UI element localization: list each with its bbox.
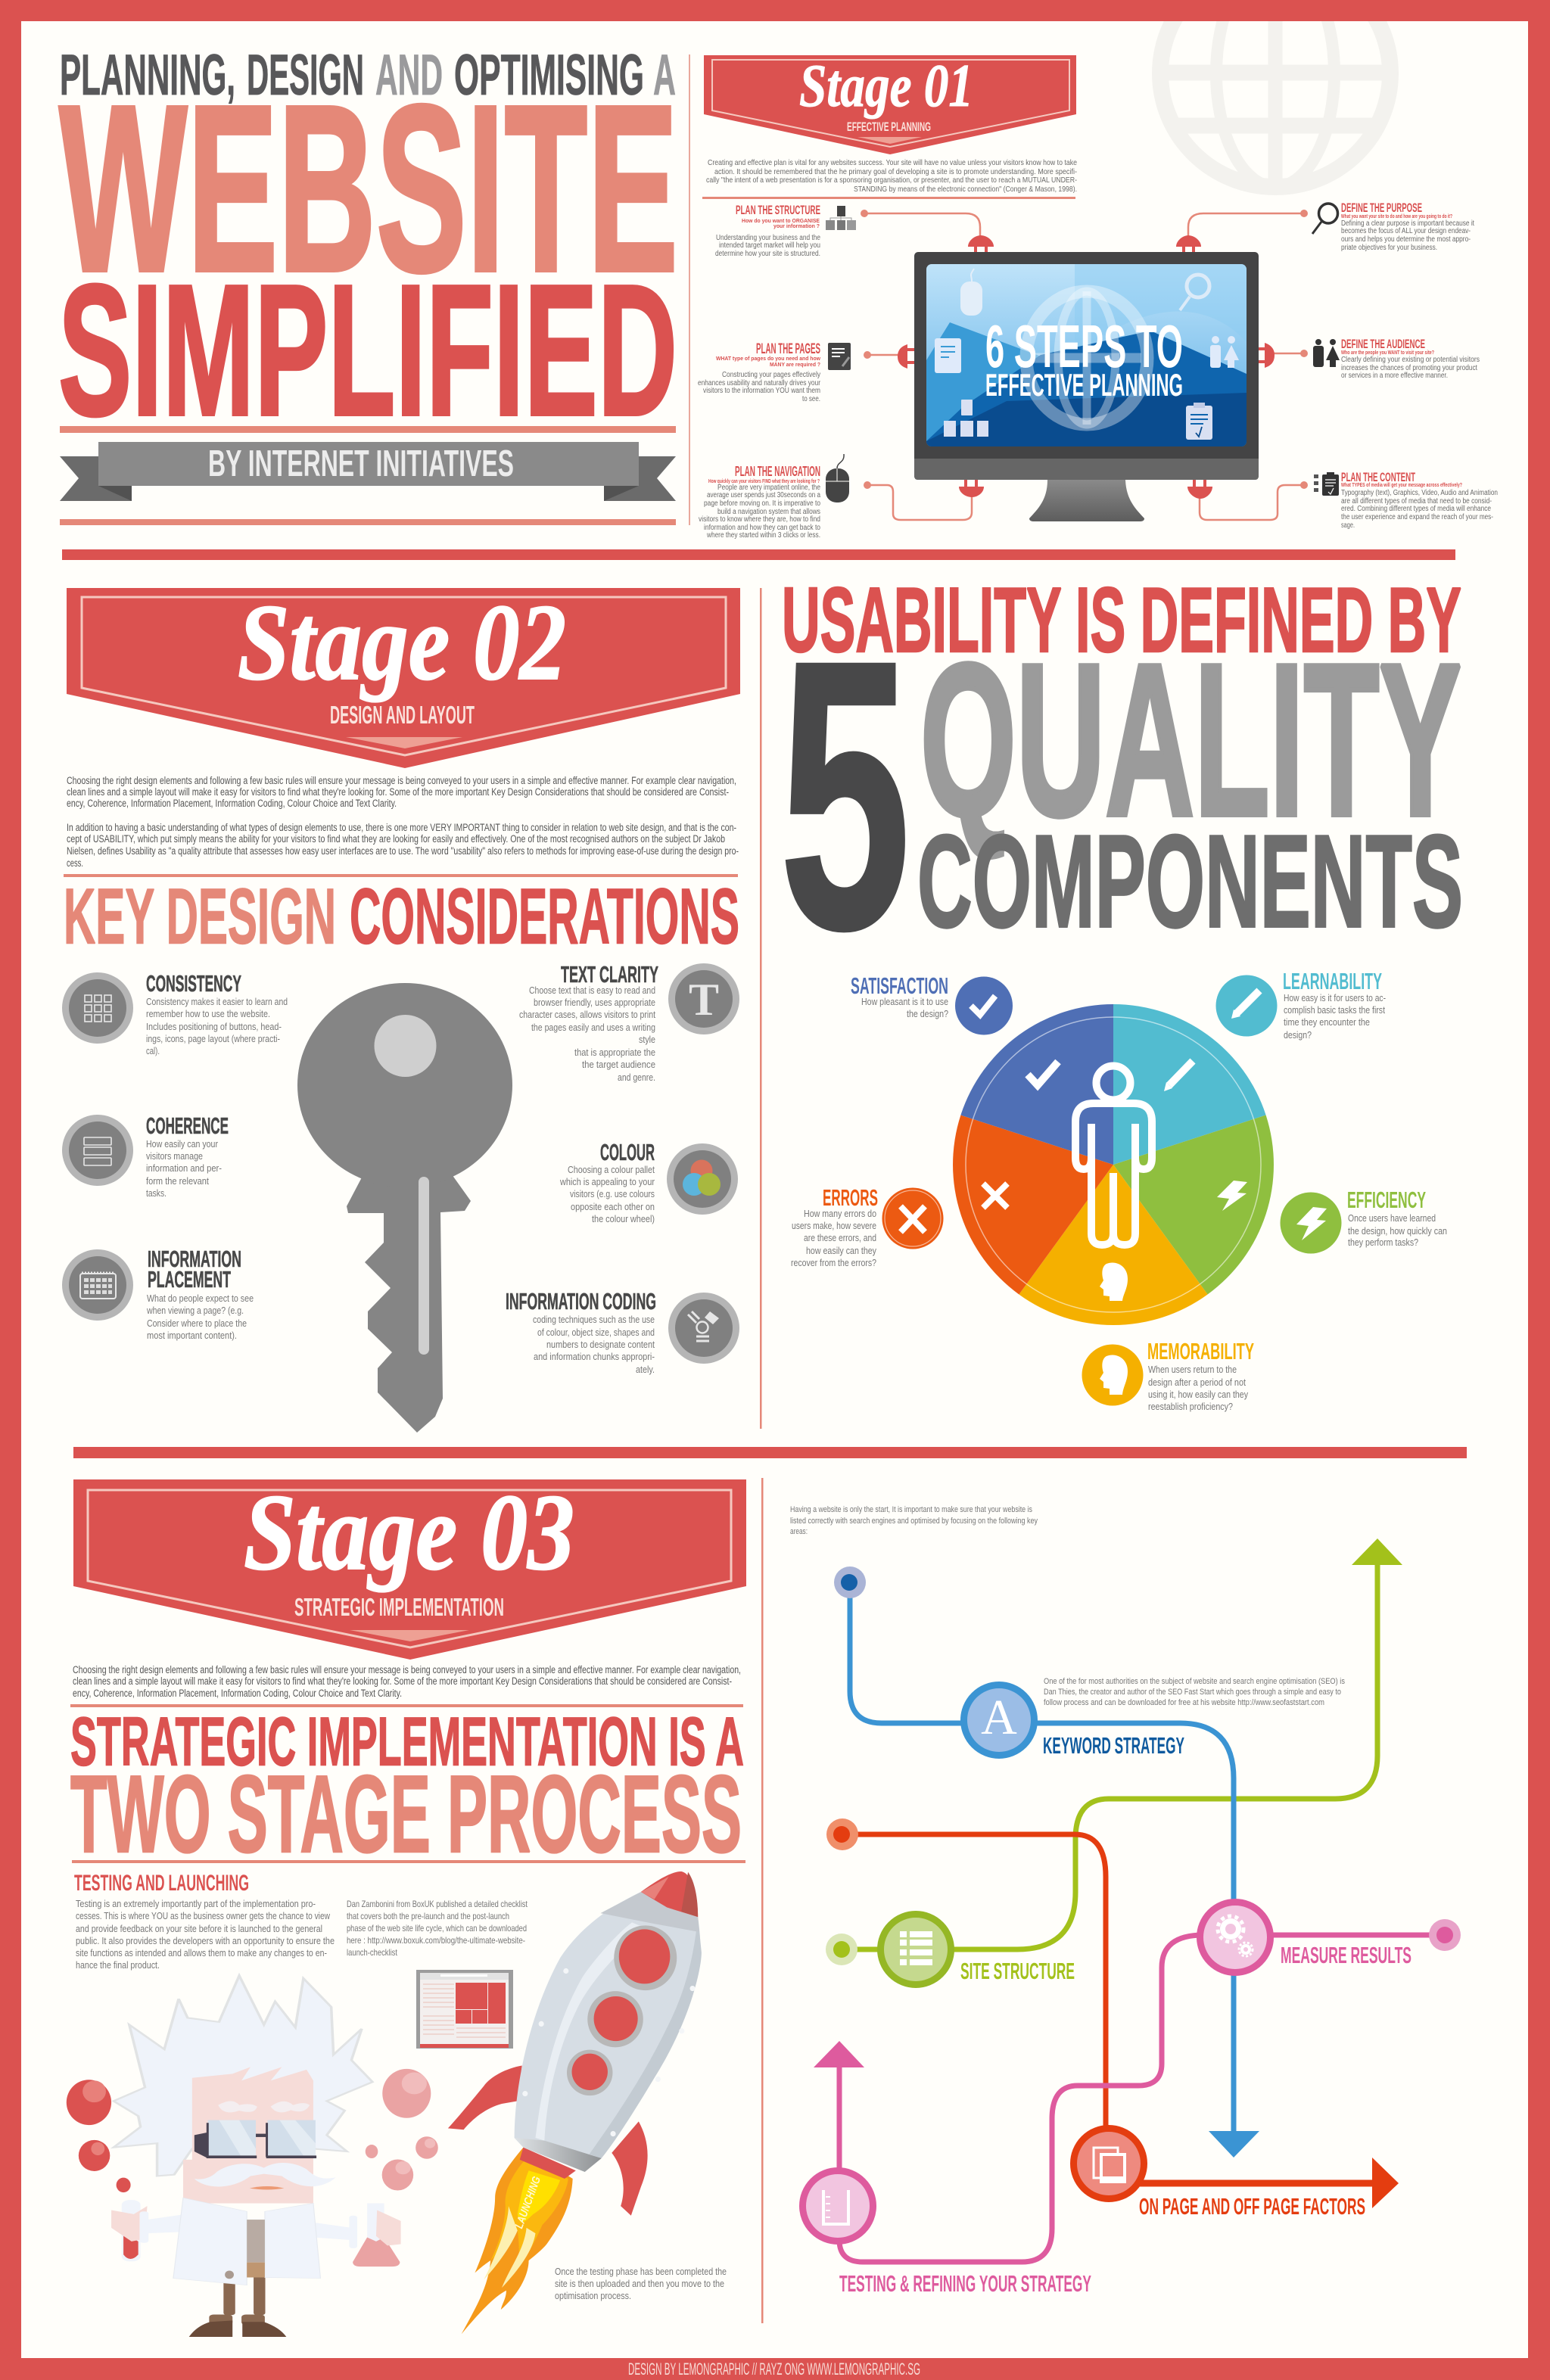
step: define the purpose: becomes the focus of ALL your design endeav- bbox=[1341, 227, 1471, 235]
intro paragraphs: cess. bbox=[67, 857, 83, 869]
callout: learnability: How easy is it for users to ac- bbox=[1284, 992, 1386, 1003]
monitor bbox=[914, 252, 1259, 521]
item: colour: the colour wheel) bbox=[592, 1213, 655, 1224]
footer credit: DESIGN BY LEMONGRAPHIC // RAYZ ONG WWW.LEMONGRAPHIC.SG bbox=[628, 2360, 920, 2378]
text block: testing: hance the final product. bbox=[76, 1959, 160, 1971]
monitor headline: EFFECTIVE PLANNING bbox=[985, 367, 1183, 403]
start point: blue bbox=[834, 1566, 866, 1598]
icon: lightning bbox=[1217, 1181, 1247, 1211]
item: colour: COLOUR bbox=[600, 1139, 655, 1165]
heading: two stage process: TWO STAGE PROCESS bbox=[70, 1753, 742, 1875]
end point: pink bbox=[1429, 1919, 1461, 1951]
panel: stage 03 strategic implementation bbox=[67, 1473, 746, 2337]
icon: org chart bbox=[826, 206, 856, 230]
callout: satisfaction bbox=[851, 972, 1013, 1035]
step: plan the navigation bbox=[699, 454, 849, 540]
callout: memorability: MEMORABILITY bbox=[1147, 1338, 1254, 1364]
rivets bbox=[522, 1968, 696, 2136]
text block: SEO note: Dan Thies, the creator and author of the SEO Fast Start which goes through a simple and easy to bbox=[1044, 1688, 1341, 1697]
text block: checklist: here : http://www.boxuk.com/blog/the-ultimate-website- bbox=[347, 1935, 525, 1946]
rocket body bbox=[515, 1871, 700, 2172]
step: plan the navigation: PLAN THE NAVIGATION bbox=[735, 464, 820, 479]
rule bbox=[64, 874, 738, 877]
step: plan the structure: Understanding your business and the bbox=[716, 234, 820, 242]
section bar bbox=[62, 549, 1455, 560]
banner: stage 03: STRATEGIC IMPLEMENTATION bbox=[294, 1593, 504, 1621]
nozzle bbox=[520, 2148, 576, 2179]
icon: lightning badge bbox=[1281, 1193, 1341, 1253]
item: consistency: Consistency makes it easier to learn and bbox=[146, 996, 288, 1007]
intro paragraph: cally "the intent of a web presentation is for a sponsoring organisation, or presenter, and the user to reach a MUTUAL UNDER- bbox=[706, 176, 1077, 185]
monitor headline bbox=[985, 313, 1183, 403]
text block: after testing: Once the testing phase has been completed the bbox=[555, 2266, 727, 2277]
intro paragraphs: In addition to having a basic understanding of what types of design elements to use, there is one more VERY IMPORTANT thing to consider in relation to web site design, and that is the con- bbox=[67, 822, 736, 833]
heading: planning, design and optimising a bbox=[60, 43, 676, 107]
icon: document bbox=[828, 343, 851, 370]
step: plan the structure: intended target market will help you bbox=[719, 241, 820, 250]
item: information coding bbox=[506, 1288, 739, 1375]
item: text clarity: Choose text that is easy to read and bbox=[529, 985, 655, 996]
item: text clarity bbox=[519, 961, 739, 1083]
step: plan the navigation: How quickly can your visitors FIND what they are looking for ? bbox=[708, 478, 820, 484]
item: information coding: and information chunks appropri- bbox=[534, 1351, 655, 1362]
text block: checklist: phase of the web site life cycle, which can be downloaded bbox=[347, 1923, 527, 1934]
intro paragraph: Creating and effective plan is vital for any websites success. Your site will have no value unless your visitors know how to take bbox=[708, 158, 1077, 167]
heading: key design considerations: CONSIDERATIONS bbox=[350, 873, 739, 961]
step: plan the structure: PLAN THE STRUCTURE bbox=[736, 203, 820, 217]
column divider bbox=[689, 54, 690, 525]
callout: satisfaction: How pleasant is it to use bbox=[861, 996, 948, 1007]
step: plan the structure: How do you want to ORGANISE bbox=[742, 217, 820, 224]
item: colour: which is appealing to your bbox=[559, 1176, 655, 1187]
banner: stage 03 bbox=[73, 1473, 746, 1660]
item: colour: opposite each other on bbox=[571, 1201, 655, 1212]
intro paragraphs: cept of USABILITY, which put simply means the ability for your visitors to find what they are looking for easily and effectively. One of the most recognised authors on the subject Dr Jakob bbox=[67, 833, 725, 845]
heading: planning, design and optimising a: AND bbox=[375, 43, 443, 107]
panel: stage 02 design and layout bbox=[62, 583, 740, 1433]
node: site structure bbox=[881, 1915, 1075, 1984]
callout: memorability: using it, how easily can they bbox=[1148, 1389, 1248, 1400]
heading: planning, design and optimising a: OPTIMISING bbox=[454, 43, 644, 107]
callout: learnability: LEARNABILITY bbox=[1283, 968, 1382, 994]
scientist face bbox=[183, 2067, 313, 2203]
item: text clarity: the target audience bbox=[582, 1059, 655, 1070]
item: information placement: What do people expect to see bbox=[147, 1293, 254, 1304]
icon: clipboard bbox=[1186, 403, 1212, 440]
step: define the audience: DEFINE THE AUDIENCE bbox=[1341, 337, 1425, 351]
icon: magnifier bbox=[1180, 275, 1209, 310]
item: colour: visitors (e.g. use colours bbox=[570, 1188, 655, 1199]
heading: planning, design and optimising a: A bbox=[653, 43, 676, 107]
launching label: LAUNCHING bbox=[512, 2174, 543, 2230]
icon: grid bbox=[62, 972, 133, 1044]
item: consistency: Includes positioning of buttons, head- bbox=[146, 1021, 282, 1032]
step: plan the pages bbox=[698, 341, 851, 403]
text block: after testing: optimisation process. bbox=[555, 2290, 631, 2301]
step: plan the content: are all different types of media that need to be consid- bbox=[1341, 497, 1492, 506]
callout: errors: users make, how severe bbox=[792, 1220, 876, 1231]
icon: head bbox=[1100, 1263, 1128, 1301]
callout: errors: how easily can they bbox=[806, 1245, 876, 1256]
icon: mouse bbox=[960, 269, 982, 316]
icon: people bbox=[1210, 336, 1239, 368]
step: plan the pages: Constructing your pages effectively bbox=[722, 371, 820, 379]
panel: usability quality components bbox=[780, 568, 1463, 1412]
item: information placement: PLACEMENT bbox=[148, 1266, 231, 1293]
step: plan the navigation: where they started within 3 clicks or less. bbox=[706, 531, 820, 540]
person outline bbox=[1075, 1066, 1152, 1245]
step: plan the content: the user experience and expand the reach of your mes- bbox=[1341, 513, 1493, 521]
step: plan the pages: enhances usability and naturally drives your bbox=[698, 379, 821, 387]
rule bbox=[70, 1704, 743, 1707]
step: define the audience: or services in a more effective manner. bbox=[1341, 372, 1448, 380]
callout: memorability: design after a period of not bbox=[1148, 1377, 1246, 1388]
item: information placement bbox=[62, 1246, 254, 1341]
item: consistency: cal). bbox=[146, 1045, 160, 1056]
rule bbox=[60, 426, 676, 433]
node: measure results bbox=[1200, 1902, 1411, 1972]
item: colour: Choosing a colour pallet bbox=[568, 1164, 655, 1175]
item: information coding: INFORMATION CODING bbox=[506, 1288, 656, 1314]
step: plan the content bbox=[1314, 470, 1498, 530]
portholes bbox=[567, 1925, 677, 2095]
text block: flow intro: Having a website is only the start, It is important to make sure that your website is bbox=[790, 1505, 1032, 1514]
icon: check bbox=[1028, 1062, 1058, 1085]
node: on page and off page factors bbox=[1073, 2128, 1365, 2220]
text block: testing: Testing is an extremely importantly part of the implementation pro- bbox=[76, 1898, 316, 1909]
icon: calendar bbox=[62, 1249, 133, 1321]
text block: checklist: launch-checklist bbox=[347, 1947, 398, 1958]
callout: satisfaction: the design? bbox=[907, 1008, 948, 1019]
text block: checklist: that covers both the pre-launch and the post-launch bbox=[347, 1911, 509, 1921]
step: plan the navigation: average user spends just 30seconds on a bbox=[707, 491, 820, 499]
step: plan the navigation: page before moving on. It is imperative to bbox=[704, 499, 820, 508]
item: text clarity: that is appropriate the bbox=[574, 1047, 655, 1058]
start point: green bbox=[826, 1934, 857, 1965]
banner: stage 01: EFFECTIVE PLANNING bbox=[847, 120, 931, 134]
text block: flow intro: areas: bbox=[790, 1527, 808, 1536]
step: plan the navigation: visitors to know where they are, how to find bbox=[699, 515, 820, 524]
heading: website: WEBSITE bbox=[59, 56, 678, 321]
step: define the purpose: What you want your site to do and how are you going to do it? bbox=[1341, 213, 1452, 219]
panel: stage 01 planning bbox=[698, 53, 1498, 540]
icon: magnifier bbox=[1312, 204, 1338, 234]
node: keyword strategy bbox=[964, 1685, 1184, 1759]
step: define the purpose: DEFINE THE PURPOSE bbox=[1341, 201, 1422, 215]
text block: testing: public. It also provides the developers with an opportunity to ensure the bbox=[76, 1935, 335, 1946]
text block: testing: cesses. This is where YOU as the business owner gets the chance to view bbox=[76, 1910, 330, 1921]
step: plan the structure: determine how your site is structured. bbox=[715, 250, 820, 258]
step: plan the content: Typography (text), Graphics, Video, Audio and Animation bbox=[1341, 489, 1498, 497]
step: plan the pages: MANY are required ? bbox=[770, 361, 820, 368]
item: information coding: numbers to designate content bbox=[546, 1339, 655, 1350]
icon: head badge bbox=[1082, 1344, 1143, 1406]
item: text clarity: the pages easily and uses a writing bbox=[531, 1022, 655, 1033]
route: green line bbox=[842, 1538, 1402, 1949]
background globe watermark bbox=[1160, 0, 1390, 187]
item: consistency: ings, icons, page layout (where practi- bbox=[146, 1033, 280, 1044]
rocket base bbox=[515, 2138, 602, 2172]
item: information placement: INFORMATION bbox=[148, 1246, 241, 1272]
icon: colour wheel bbox=[667, 1143, 738, 1215]
icon: pencil badge bbox=[1215, 975, 1278, 1037]
connectors and plugs bbox=[861, 210, 1308, 520]
step: define the audience: Who are the people you WANT to visit your site? bbox=[1341, 349, 1434, 356]
step: plan the content: sage. bbox=[1341, 521, 1355, 530]
callout: errors: ERRORS bbox=[823, 1184, 878, 1211]
text block: SEO note: One of the for most authorities on the subject of website and search engine optimisation (SEO) is bbox=[1044, 1677, 1345, 1686]
callout: errors: recover from the errors? bbox=[791, 1257, 876, 1268]
intro paragraph: STANDING by means of the electronic connection" (Conger & Mason, 1998). bbox=[854, 185, 1077, 194]
icon: cross bbox=[983, 1184, 1007, 1208]
step: define the purpose: priate objectives for your business. bbox=[1341, 244, 1437, 252]
step: define the purpose bbox=[1312, 201, 1474, 252]
callout: errors: are these errors, and bbox=[804, 1232, 876, 1243]
scientist hair bbox=[114, 1976, 372, 2176]
text block: after testing bbox=[555, 2266, 727, 2301]
callout: memorability bbox=[1082, 1338, 1254, 1412]
node: measure results: MEASURE RESULTS bbox=[1281, 1942, 1411, 1968]
start point: orange bbox=[826, 1818, 858, 1850]
heading: testing and launching: TESTING AND LAUNCHING bbox=[74, 1871, 249, 1896]
item: information placement: Consider where to place the bbox=[147, 1318, 247, 1329]
icon: letter T: T bbox=[689, 975, 719, 1025]
step: plan the content: PLAN THE CONTENT bbox=[1341, 470, 1415, 484]
step: define the audience: Clearly defining your existing or potential visitors bbox=[1341, 356, 1480, 364]
step: plan the pages: WHAT type of pages do you need and how bbox=[716, 355, 820, 362]
rule bbox=[60, 519, 676, 525]
item: coherence bbox=[62, 1112, 229, 1199]
item: consistency: remember how to use the website. bbox=[146, 1008, 270, 1019]
callout: efficiency: the design, how quickly can bbox=[1348, 1225, 1447, 1237]
mouth bbox=[250, 2186, 284, 2189]
item: text clarity: TEXT CLARITY bbox=[561, 961, 658, 988]
ribbon: by internet initiatives: BY INTERNET INITIATIVES bbox=[208, 443, 514, 484]
moustache bbox=[195, 2163, 336, 2186]
illustration: rocket bbox=[448, 1871, 702, 2334]
banner: stage 01 bbox=[704, 53, 1076, 154]
callout: errors: How many errors do bbox=[804, 1208, 876, 1219]
callout: efficiency: EFFICIENCY bbox=[1347, 1187, 1426, 1213]
panel: optimisation flow map bbox=[790, 1505, 1461, 2297]
callout: learnability bbox=[1215, 968, 1386, 1041]
icon: people bbox=[1313, 339, 1340, 367]
icon: cross badge bbox=[882, 1188, 943, 1249]
icon: mouse bbox=[826, 454, 849, 502]
step: define the purpose: Defining a clear purpose is important because it bbox=[1341, 219, 1474, 228]
bubbles bbox=[67, 2069, 438, 2192]
heading: key design considerations: KEY DESIGN bbox=[64, 873, 336, 961]
item: consistency: CONSISTENCY bbox=[146, 970, 241, 997]
icon: letter T bbox=[668, 963, 739, 1034]
icon: stacked rows bbox=[62, 1115, 133, 1186]
route: pink line bbox=[814, 1935, 1445, 2262]
callout: satisfaction: SATISFACTION bbox=[851, 972, 948, 999]
route: blue line bbox=[850, 1582, 1259, 2158]
step: plan the navigation: People are very impatient online, the bbox=[717, 484, 820, 492]
step: define the purpose: ours and helps you determine the most appro- bbox=[1341, 235, 1471, 244]
section bar bbox=[73, 1447, 1467, 1458]
eyebrows bbox=[218, 2101, 310, 2112]
item: information coding: of colour, object size, shapes and bbox=[537, 1327, 655, 1338]
item: coherence: How easily can your bbox=[146, 1138, 219, 1150]
illustration: scientist bbox=[67, 1976, 438, 2337]
banner: stage 02 bbox=[67, 583, 740, 768]
step: define the audience: increases the chances of promoting your product bbox=[1341, 364, 1477, 372]
callout: memorability: reestablish proficiency? bbox=[1148, 1401, 1233, 1412]
monitor screen bbox=[926, 264, 1247, 446]
callout: efficiency bbox=[1281, 1187, 1447, 1253]
callout: efficiency: they perform tasks? bbox=[1348, 1237, 1418, 1248]
step: define the audience bbox=[1313, 337, 1480, 380]
callout: errors bbox=[791, 1184, 943, 1268]
step: plan the pages: to see. bbox=[802, 395, 820, 403]
text block: testing: site functions as intended and allows them to make any changes to en- bbox=[76, 1947, 327, 1958]
text block: testing: and provide feedback on your site before it is launched to the general bbox=[76, 1923, 322, 1934]
panel: main title bbox=[58, 43, 678, 525]
left fin bbox=[448, 2066, 522, 2130]
text block: flow intro: listed correctly with search engines and optimised by focusing on the following key bbox=[790, 1517, 1038, 1526]
item: text clarity: and genre. bbox=[618, 1072, 655, 1083]
intro paragraph: clean lines and a simple layout will make it easy for visitors to find what they're looking for. Some of the more important Key Design Considerations that should be considered are Consist- bbox=[73, 1675, 732, 1687]
key illustration bbox=[297, 983, 512, 1433]
banner: stage 02: Stage 02 bbox=[238, 583, 566, 703]
item: coherence: tasks. bbox=[146, 1187, 167, 1199]
heading: planning, design and optimising a: DESIGN bbox=[247, 43, 364, 107]
route: orange line bbox=[842, 1834, 1399, 2208]
rule bbox=[72, 1860, 745, 1863]
left test tube and hand bbox=[111, 2200, 148, 2261]
intro paragraph: action. It should be remembered that the he primary goal of developing a site is to promote understanding. More specifi- bbox=[714, 167, 1077, 176]
item: text clarity: browser friendly, uses appropriate bbox=[534, 997, 655, 1008]
intro paragraphs: clean lines and a simple layout will make it easy for visitors to find what they're looking for. Some of the more important Key Design Considerations that should be considered are Consist- bbox=[67, 786, 729, 798]
item: coherence: form the relevant bbox=[146, 1175, 209, 1187]
item: text clarity: character cases, allows visitors to print bbox=[519, 1009, 655, 1020]
big numeral 5: 5 bbox=[780, 582, 910, 1008]
icon: clipboard and media bbox=[1314, 472, 1339, 496]
item: text clarity: style bbox=[639, 1034, 655, 1045]
heading: strategic implementation is a: STRATEGIC IMPLEMENTATION IS A bbox=[70, 1704, 744, 1780]
node: site structure: SITE STRUCTURE bbox=[960, 1958, 1075, 1984]
rule bbox=[702, 197, 1075, 199]
rocket band bbox=[600, 1892, 699, 1932]
callout: memorability: When users return to the bbox=[1148, 1364, 1237, 1375]
intro paragraphs: ency, Coherence, Information Placement, Information Coding, Colour Choice and Text Clarity. bbox=[67, 798, 397, 809]
screen globe bbox=[1026, 291, 1147, 425]
intro paragraph bbox=[73, 1664, 741, 1699]
column divider bbox=[760, 588, 761, 1429]
flame bbox=[462, 2148, 573, 2334]
intro paragraph bbox=[706, 158, 1077, 194]
icon: connector symbol bbox=[668, 1293, 739, 1364]
item: coherence: COHERENCE bbox=[146, 1112, 229, 1139]
right flask and hand bbox=[349, 2203, 401, 2266]
step: plan the content: What TYPES of media will get your message across effectively? bbox=[1341, 481, 1462, 488]
item: information placement: most important content). bbox=[147, 1330, 237, 1341]
intro paragraphs: Nielsen, defines Usability as "a quality attribute that assesses how easy user interfaces are to use. The word "usability" also refers to methods for improving ease-of-use during the design pro- bbox=[67, 845, 739, 857]
icon: org chart bbox=[944, 400, 988, 437]
text block: after testing: site is then uploaded and then you move to the bbox=[555, 2278, 724, 2289]
step: plan the pages: visitors to the information YOU want them bbox=[703, 387, 820, 395]
heading: simplified: SIMPLIFIED bbox=[58, 246, 677, 455]
banner: stage 02: DESIGN AND LAYOUT bbox=[330, 701, 475, 729]
intro paragraph: ency, Coherence, Information Placement, Information Coding, Colour Choice and Text Clarity. bbox=[73, 1688, 402, 1699]
icon: document bbox=[935, 338, 961, 373]
callout: efficiency: Once users have learned bbox=[1348, 1212, 1436, 1224]
node: keyword strategy: KEYWORD STRATEGY bbox=[1043, 1732, 1184, 1759]
callout: learnability: design? bbox=[1284, 1029, 1312, 1041]
step: plan the navigation: build a navigation system that allows bbox=[717, 508, 820, 516]
item: consistency bbox=[62, 970, 288, 1056]
node: on page and off page factors: ON PAGE AND OFF PAGE FACTORS bbox=[1139, 2193, 1365, 2220]
step: plan the content: ered. Combining different types of media will enhance bbox=[1341, 505, 1491, 513]
text block: checklist bbox=[347, 1899, 528, 1958]
item: colour bbox=[559, 1139, 738, 1224]
item: coherence: visitors manage bbox=[146, 1150, 203, 1162]
node: keyword strategy: A bbox=[981, 1690, 1017, 1745]
icon: web page layout bbox=[416, 1970, 513, 2049]
intro paragraph: Choosing the right design elements and following a few basic rules will ensure your message is being conveyed to your users in a simple and effective manner. For example clear navigation, bbox=[73, 1664, 741, 1675]
intro paragraphs: Choosing the right design elements and following a few basic rules will ensure your message is being conveyed to your users in a simple and effective manner. For example clear navigation, bbox=[67, 775, 736, 786]
rocket nose bbox=[641, 1871, 698, 1917]
pie chart: quality components bbox=[953, 1004, 1274, 1325]
monitor headline: 6 STEPS TO bbox=[985, 313, 1183, 380]
text block: SEO note: follow process and can be downloaded for free at his website http://www.seofaststart.com bbox=[1044, 1698, 1324, 1707]
text block: testing bbox=[76, 1898, 335, 1971]
callout: learnability: time they encounter the bbox=[1284, 1016, 1370, 1028]
lab coat and body bbox=[148, 2198, 351, 2337]
banner: stage 03: Stage 03 bbox=[244, 1473, 574, 1593]
heading: planning, design and optimising a: PLANNING, bbox=[60, 43, 235, 107]
item: coherence: information and per- bbox=[146, 1162, 222, 1174]
banner: stage 01: Stage 01 bbox=[799, 53, 973, 120]
column divider bbox=[761, 1478, 763, 2323]
step: plan the pages: PLAN THE PAGES bbox=[756, 341, 820, 357]
step: plan the structure: your information ? bbox=[773, 222, 820, 229]
glasses bbox=[195, 2120, 316, 2158]
ribbon: by internet initiatives bbox=[60, 442, 676, 501]
callout: learnability: complish basic tasks the first bbox=[1284, 1004, 1385, 1016]
icon: pencil bbox=[1164, 1061, 1193, 1091]
text block: SEO note bbox=[1044, 1677, 1345, 1707]
step: plan the navigation: information and how they can get back to bbox=[704, 524, 820, 532]
item: information coding: ately. bbox=[636, 1364, 655, 1375]
node: testing and refining bbox=[802, 2170, 1091, 2297]
item: information coding: coding techniques such as the use bbox=[533, 1314, 655, 1325]
right fin bbox=[612, 2121, 648, 2216]
item: information placement: when viewing a page? (e.g. bbox=[146, 1305, 244, 1316]
intro paragraphs bbox=[67, 775, 739, 869]
icon: check badge bbox=[955, 976, 1013, 1035]
text block: checklist: Dan Zambonini from BoxUK published a detailed checklist bbox=[347, 1899, 528, 1909]
step: plan the structure bbox=[715, 203, 856, 258]
node: testing and refining: TESTING & REFINING YOUR STRATEGY bbox=[839, 2270, 1091, 2297]
text block: flow intro bbox=[790, 1505, 1038, 1536]
